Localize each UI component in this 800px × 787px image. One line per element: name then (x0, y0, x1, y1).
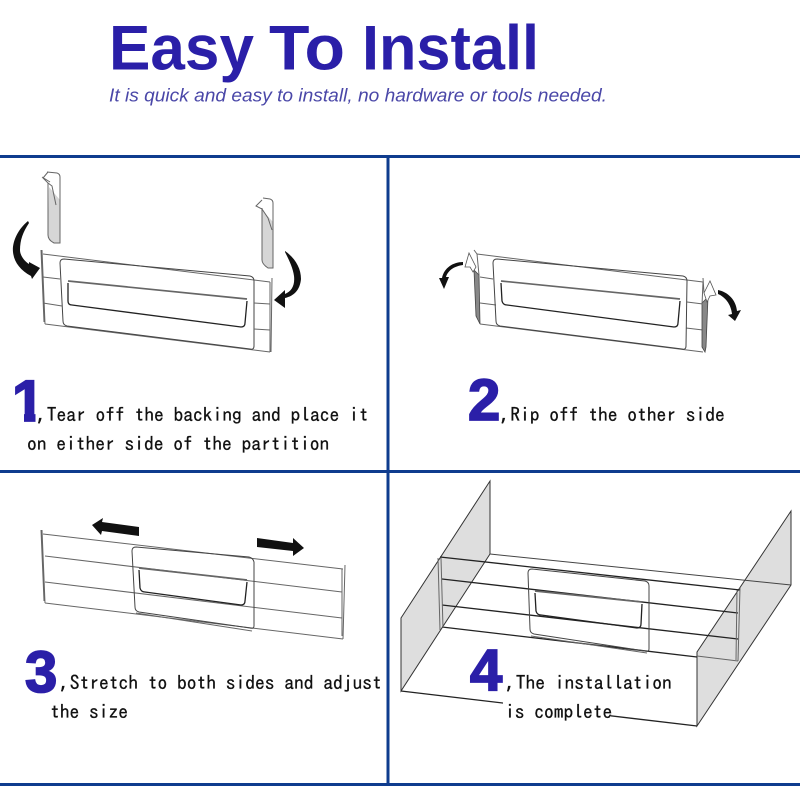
step 3 text (50, 674, 382, 722)
icon: curved arrow right (274, 251, 301, 308)
panel: step 4 (401, 481, 791, 726)
step 1 text: on either side of the partition (27, 434, 329, 454)
adhesive strip right (256, 198, 273, 268)
right wall (697, 511, 791, 726)
title: Install (362, 14, 539, 84)
panel: step 3 (25, 518, 382, 722)
icon: curved arrow right (718, 290, 741, 321)
partition illustration 4 (438, 557, 740, 661)
step 2 text: ,Rip off the other side (500, 406, 725, 424)
icon: curved arrow left (439, 262, 463, 289)
number 3: 3 (25, 640, 57, 705)
title: To (269, 14, 345, 84)
number 4: 4 (470, 638, 502, 703)
title (109, 14, 539, 84)
subtitle: It is quick and easy to install, no hardware or tools needed. (109, 84, 607, 106)
left wall (401, 481, 490, 691)
step 1 text (27, 406, 368, 454)
partition illustration 2 (477, 254, 703, 352)
partition illustration 3 (41, 530, 345, 639)
icon: curved arrow left (13, 221, 40, 279)
step 3 text: the size (50, 702, 128, 722)
adhesive strip left (42, 172, 60, 243)
number 1: 1 (12, 369, 44, 434)
partition illustration 1 (41, 250, 272, 352)
number 2: 2 (468, 368, 500, 433)
peeled strip left (465, 250, 480, 324)
icon: arrow right (257, 538, 304, 556)
back floor line (490, 554, 791, 585)
step 4 text: is complete (505, 702, 612, 722)
step 1 text: ,Tear off the backing and place it (37, 406, 368, 424)
panel: step 2 (439, 250, 741, 433)
panel: step 1 (12, 172, 368, 454)
step 3 text: ,Stretch to both sides and adjust (60, 674, 382, 692)
title: Easy (109, 14, 254, 84)
front floor line (401, 691, 697, 726)
icon: arrow left (92, 518, 139, 536)
step 4 text (503, 674, 672, 723)
peeled strip right (702, 278, 716, 352)
step 4 text: ,The installation (506, 674, 672, 692)
